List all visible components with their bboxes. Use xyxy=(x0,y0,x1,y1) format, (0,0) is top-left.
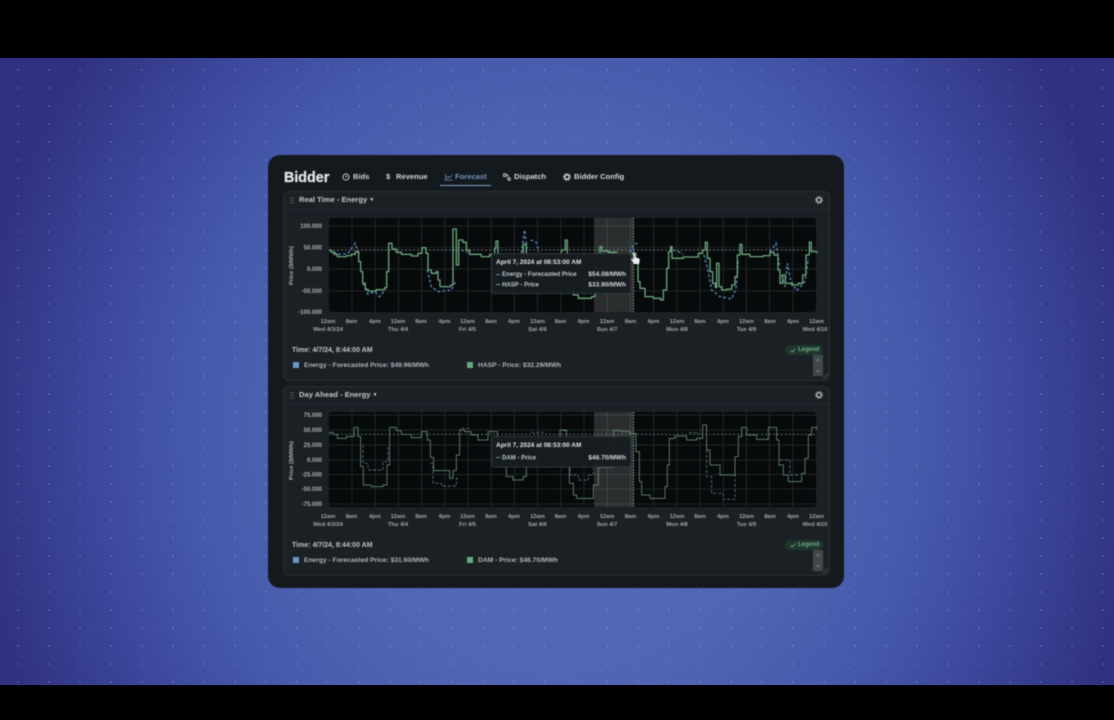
x axis labels: 8am xyxy=(485,319,497,325)
x axis labels: 4pm xyxy=(717,319,729,325)
tooltip: Energy - Forecasted Price xyxy=(502,272,577,278)
nav tab: Bidder Config: Bidder Config xyxy=(574,172,624,180)
nav tab: Bids xyxy=(342,172,370,182)
x axis labels: Wed 4/10 xyxy=(802,327,828,333)
x axis labels: 12am xyxy=(460,514,475,520)
chart: real time energy xyxy=(289,218,828,333)
x axis labels: Fri 4/5 xyxy=(459,522,477,528)
tooltip: $33.90/MWh xyxy=(588,282,626,288)
y axis labels: 0.000 xyxy=(307,267,323,273)
panel: bidder app window xyxy=(268,155,844,588)
x axis labels: 4pm xyxy=(439,514,450,520)
card: real time energy xyxy=(283,191,830,381)
x axis labels xyxy=(313,514,828,528)
nav tab: Dispatch: Dispatch xyxy=(514,172,546,180)
y axis labels: 100.000 xyxy=(300,224,323,230)
y axis labels: 25.000 xyxy=(304,443,323,449)
x axis labels: 4pm xyxy=(648,319,659,325)
card heading: Day Ahead - Energy ▾ xyxy=(299,390,376,398)
x axis labels: 8am xyxy=(555,319,566,325)
x axis labels: 4pm xyxy=(508,319,520,325)
x axis labels: 4pm xyxy=(439,319,450,325)
icon: settings gear xyxy=(814,390,824,400)
tooltip xyxy=(492,254,631,294)
y axis labels: -100.000 xyxy=(298,310,323,316)
x axis labels: Tue 4/9 xyxy=(737,522,757,528)
x axis labels: 12am xyxy=(321,514,335,520)
x axis labels: 8am xyxy=(555,514,566,520)
x axis labels: Sun 4/7 xyxy=(597,522,617,528)
x axis labels: 8am xyxy=(346,319,357,325)
legend toggle: Legend xyxy=(798,542,819,548)
tooltip: April 7, 2024 at 08:53:00 AM xyxy=(496,259,581,266)
tooltip: $54.08/MWh xyxy=(588,271,626,278)
legend scroller xyxy=(813,355,823,376)
legend item: energy forecasted price: Energy - Forecasted Price: $31.60/MWh xyxy=(304,556,429,564)
tooltip: $46.70/MWh xyxy=(588,454,626,462)
x axis labels: 12am xyxy=(739,319,754,325)
nav tab: Revenue: Revenue xyxy=(396,172,428,180)
legend scroller xyxy=(813,550,823,571)
x axis labels: 12am xyxy=(530,514,545,520)
card heading: Real Time - Energy ▾ xyxy=(299,194,373,204)
x axis labels: Thu 4/4 xyxy=(388,327,409,333)
nav tab: Bidder Config xyxy=(562,172,624,182)
nav tab: Bids: Bids xyxy=(353,172,369,180)
y axis labels: -50.000 xyxy=(302,289,323,295)
tooltip: HASP - Price xyxy=(502,282,539,288)
x axis labels: 8am xyxy=(625,319,636,325)
x axis labels: 12am xyxy=(670,319,684,325)
series: dam price (solid) xyxy=(329,425,817,498)
resize handle xyxy=(822,568,828,574)
x axis labels: Mon 4/8 xyxy=(666,522,689,528)
series: energy forecasted price (dashed) xyxy=(329,230,808,299)
x axis labels: 8am xyxy=(764,319,776,325)
x axis labels: 4pm xyxy=(369,319,381,325)
time readout: Time: 4/7/24, 8:44:00 AM xyxy=(292,542,373,549)
x axis labels: 12am xyxy=(809,514,824,520)
y axis labels xyxy=(302,413,323,508)
x axis labels: 8am xyxy=(625,514,636,520)
x axis labels: Sat 4/6 xyxy=(528,522,548,528)
time readout: Time: 4/7/24, 8:44:00 AM xyxy=(292,347,373,354)
y axis labels: 75.000 xyxy=(304,413,323,419)
x axis labels: 4pm xyxy=(578,319,589,325)
x axis labels: Wed 4/10 xyxy=(802,522,828,528)
y axis labels: -50.000 xyxy=(302,487,323,493)
card: day ahead energy xyxy=(283,386,830,576)
legend item: energy forecasted price xyxy=(292,361,562,370)
icon: hand cursor xyxy=(631,253,640,264)
x axis labels: 12am xyxy=(670,514,684,520)
legend item: energy forecasted price: DAM - Price: $46.70/MWh xyxy=(478,556,558,564)
tooltip xyxy=(492,436,631,467)
icon: drag handle xyxy=(290,392,294,399)
x axis labels: Wed 4/3/24 xyxy=(313,522,344,528)
y axis labels: 0.000 xyxy=(307,458,323,464)
x axis labels: 4pm xyxy=(578,514,589,520)
y axis labels: -25.000 xyxy=(302,473,323,479)
nav tab: Forecast (active): Forecast xyxy=(455,172,487,180)
x axis labels: 8am xyxy=(415,514,427,520)
nav tab: Dispatch xyxy=(502,172,546,182)
x axis labels: 4pm xyxy=(648,514,659,520)
x axis labels: 12am xyxy=(739,514,754,520)
chart: day ahead energy xyxy=(289,412,828,528)
x axis labels: Wed 4/3/24 xyxy=(313,327,344,333)
x axis labels: 8am xyxy=(694,319,706,325)
legend toggle xyxy=(785,540,823,550)
title: Bidder xyxy=(284,170,329,186)
y axis labels: -75.000 xyxy=(302,502,323,508)
legend item: energy forecasted price: HASP - Price: $32.29/MWh xyxy=(478,362,561,368)
x axis labels: 12am xyxy=(460,319,475,325)
y axis title: Price ($/MWh) xyxy=(289,441,295,480)
icon: settings gear xyxy=(814,196,824,204)
tooltip: April 7, 2024 at 08:53:00 AM xyxy=(496,442,581,449)
x axis labels: 4pm xyxy=(369,514,381,520)
x axis labels: 12am xyxy=(600,514,614,520)
x axis labels: 12am xyxy=(600,319,614,325)
x axis labels: 12am xyxy=(321,319,335,325)
x axis labels: 4pm xyxy=(787,514,799,520)
x axis labels: 8am xyxy=(415,319,427,325)
legend item: energy forecasted price: Energy - Forecasted Price: $49.96/MWh xyxy=(304,362,429,368)
x axis labels: 8am xyxy=(764,514,776,520)
y axis title: Price ($/MWh) xyxy=(289,246,295,285)
x axis labels: 4pm xyxy=(508,514,520,520)
x axis labels: Fri 4/5 xyxy=(459,327,477,333)
y axis labels: 50.000 xyxy=(304,428,323,434)
resize handle xyxy=(822,373,828,379)
nav tab: Forecast (active) xyxy=(440,170,490,186)
series: hasp price (solid) xyxy=(329,229,817,300)
legend toggle: Legend xyxy=(798,347,819,353)
legend item: energy forecasted price xyxy=(292,556,558,564)
x axis labels: 4pm xyxy=(787,319,799,325)
legend toggle xyxy=(785,345,823,355)
x axis labels xyxy=(313,319,828,333)
tooltip: DAM - Price xyxy=(502,456,537,462)
x axis labels: Tue 4/9 xyxy=(737,327,757,333)
x axis labels: 8am xyxy=(485,514,497,520)
x axis labels: 8am xyxy=(346,514,357,520)
x axis labels: 12am xyxy=(391,514,405,520)
x axis labels: 8am xyxy=(694,514,706,520)
x axis labels: 12am xyxy=(530,319,545,325)
x axis labels: 4pm xyxy=(717,514,729,520)
series: energy forecasted price (dashed) xyxy=(363,428,800,499)
icon: drag handle xyxy=(290,197,294,204)
x axis labels: 12am xyxy=(809,319,824,325)
x axis labels: Sun 4/7 xyxy=(597,327,617,333)
y axis labels: 50.000 xyxy=(304,246,323,252)
nav tab: Revenue: $ xyxy=(386,172,390,180)
x axis labels: Sat 4/6 xyxy=(528,327,548,333)
y axis labels xyxy=(298,224,323,316)
x axis labels: 12am xyxy=(391,319,405,325)
x axis labels: Mon 4/8 xyxy=(666,327,689,333)
x axis labels: Thu 4/4 xyxy=(388,522,409,528)
